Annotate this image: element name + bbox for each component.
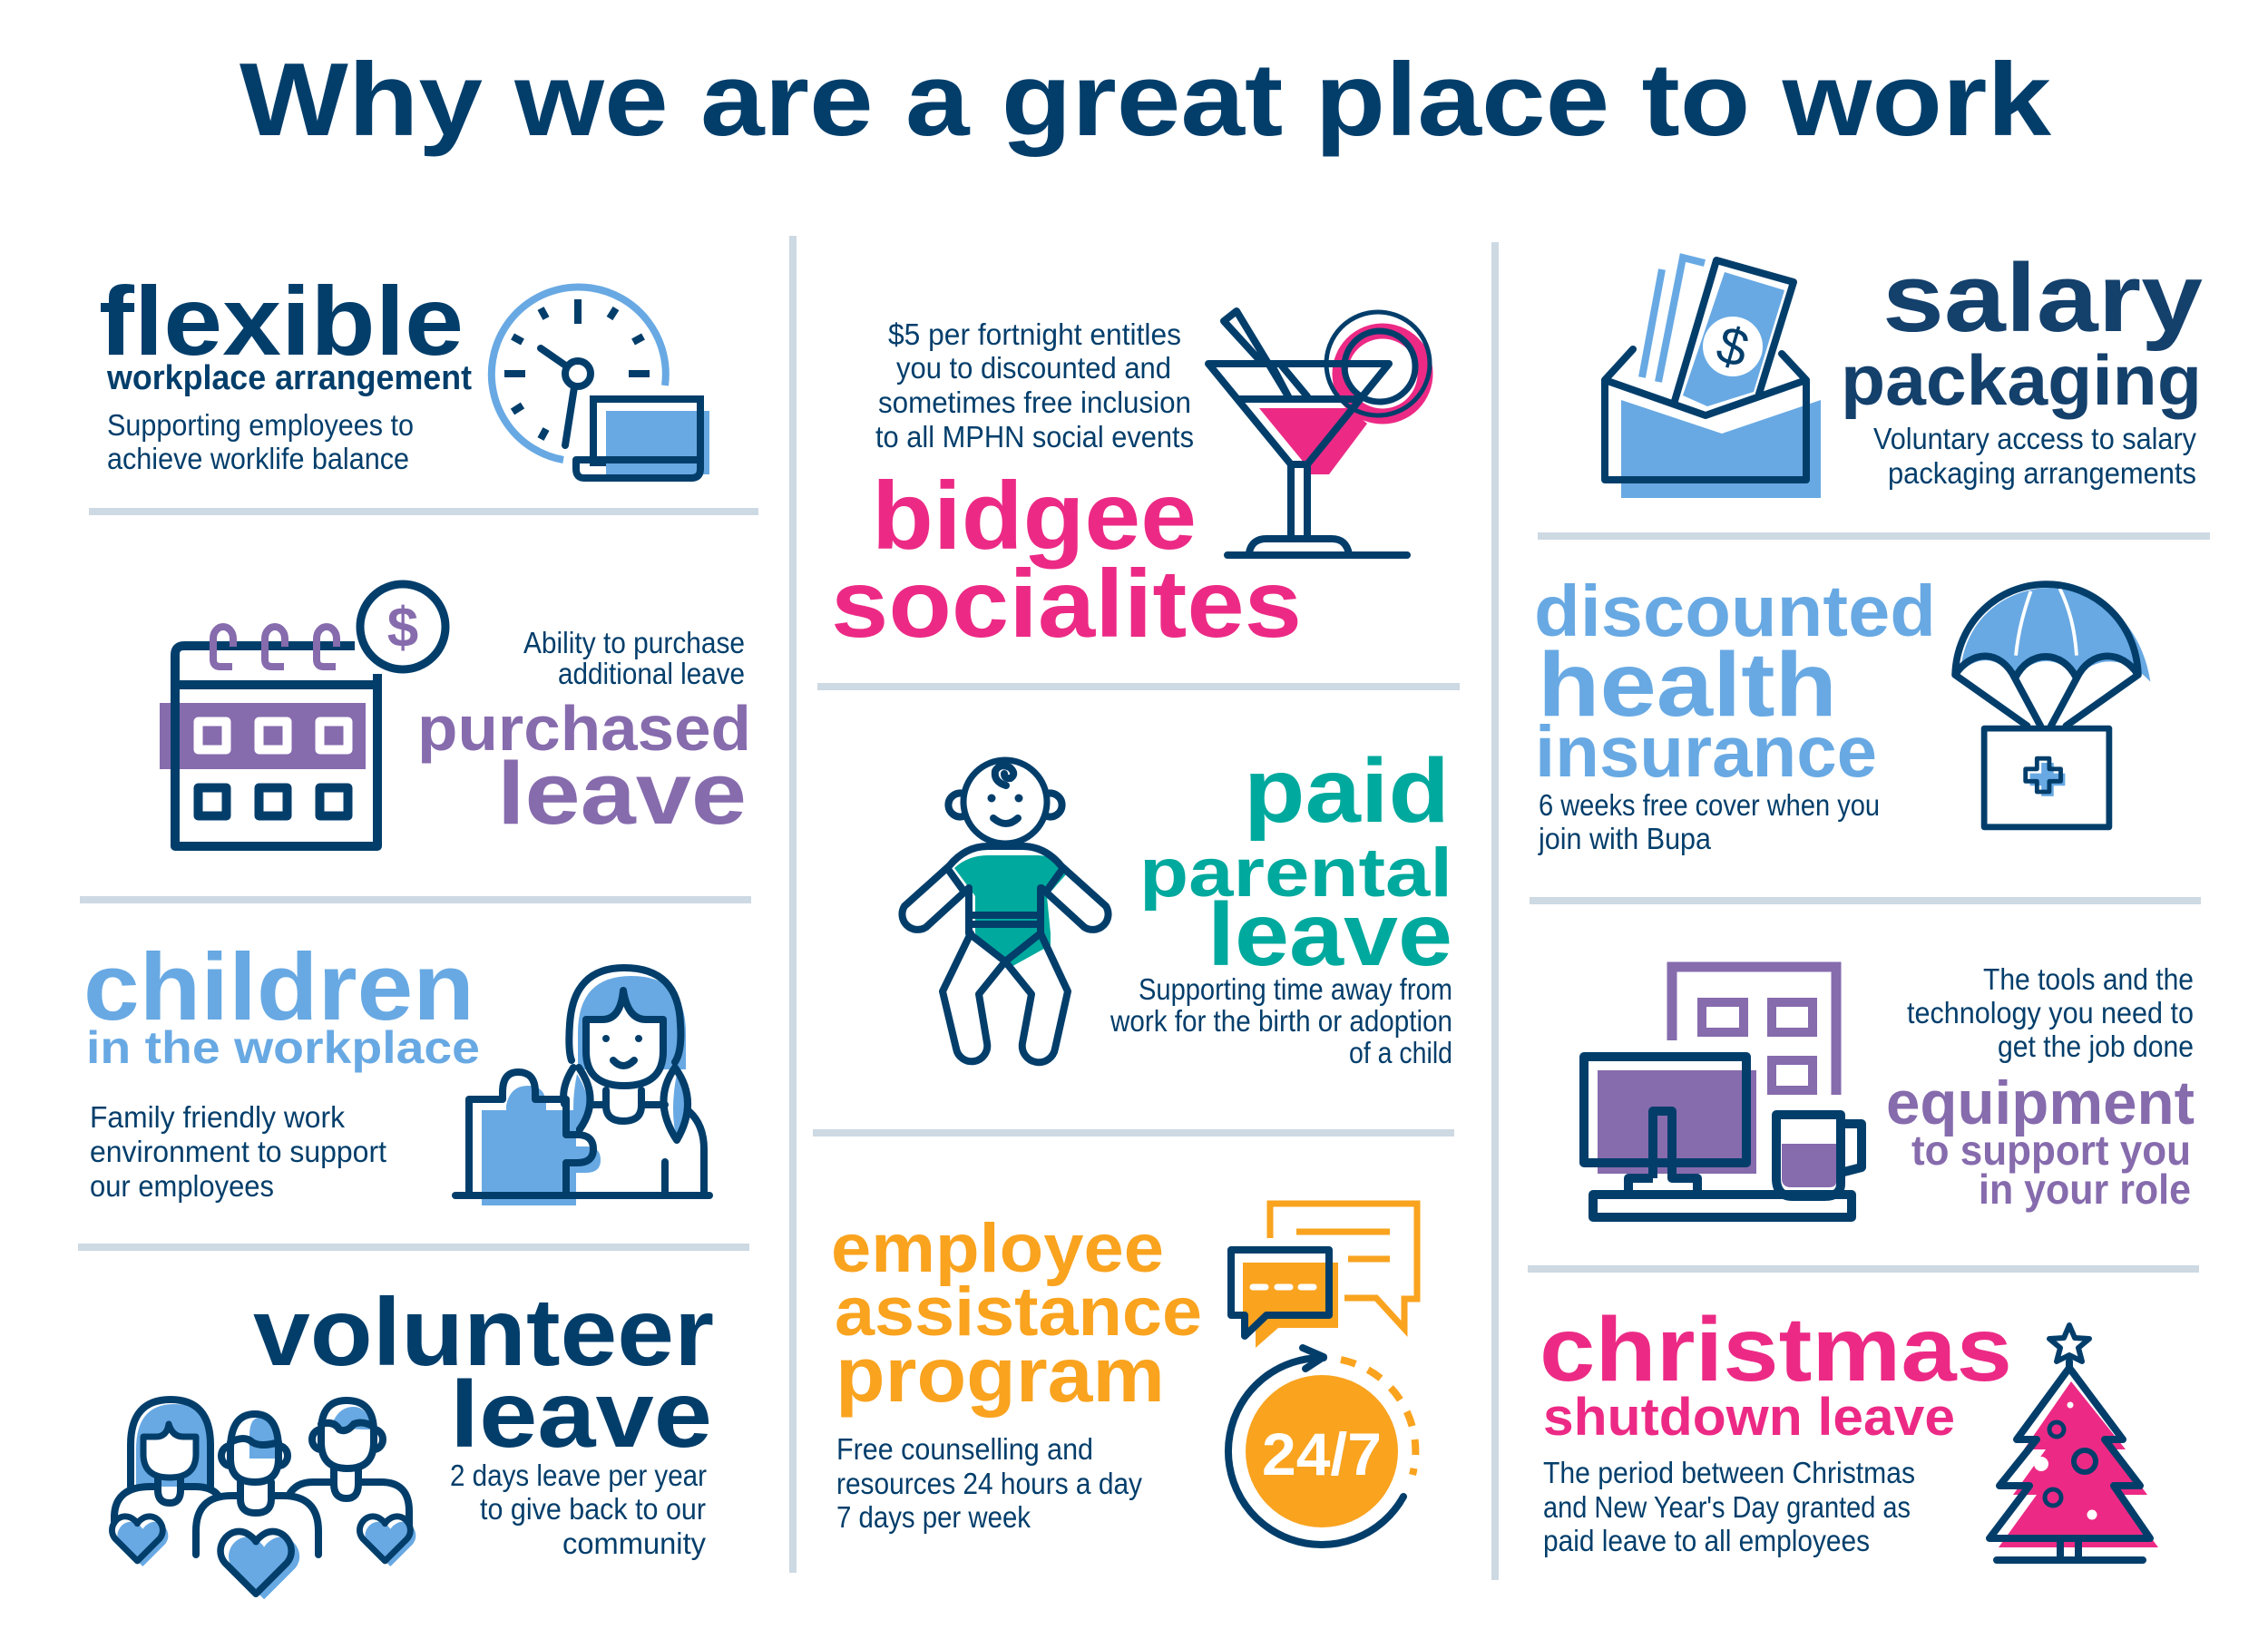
description: bidgee socialites [875, 317, 1194, 454]
description: salary packaging: Voluntary access to salary [1873, 422, 2196, 455]
description: employee assistance program: resources 24 hours a day [836, 1467, 1142, 1500]
description: paid parental leave: work for the birth or adoption [1110, 1004, 1452, 1038]
heading: bidgee: bidgee [872, 463, 1197, 570]
description: discounted health insurance: join with Bupa [1538, 822, 1712, 855]
icon: envelope with money [1605, 258, 1821, 498]
description: employee assistance program [836, 1432, 1142, 1534]
description: christmas: The period between Christmas [1543, 1456, 1915, 1489]
subheading: to support you: to support you [1911, 1127, 2191, 1174]
panel: volunteer leave [112, 1279, 714, 1599]
description: bidgee socialites: $5 per fortnight entitles [888, 317, 1181, 351]
panel: flexible workplace arrangement [99, 266, 709, 478]
panel: paid parental leave [902, 740, 1452, 1069]
heading: purchased: purchased [417, 693, 751, 764]
description: volunteer leave [450, 1459, 707, 1560]
description: equipment: get the job done [1998, 1029, 2194, 1063]
panel: children in the workplace [83, 934, 709, 1205]
icon: 24/7 clock: 24/7 [1262, 1420, 1382, 1488]
icon: cocktail glass [1208, 311, 1430, 555]
heading: parental: parental [1139, 834, 1452, 912]
description: equipment [1907, 962, 2194, 1063]
description: paid parental leave: of a child [1349, 1036, 1452, 1069]
description: discounted health insurance: 6 weeks free cover when you [1539, 788, 1880, 822]
heading: leave: leave [450, 1362, 712, 1468]
panel: purchased leave [160, 584, 751, 846]
description: salary packaging: packaging arrangements [1888, 456, 2196, 490]
description: bidgee socialites: sometimes free inclusion [878, 385, 1191, 419]
description: employee assistance program: 7 days per week [836, 1500, 1031, 1534]
heading: employee: employee [831, 1210, 1164, 1287]
description: children: our employees [90, 1169, 274, 1203]
description: bidgee socialites: to all MPHN social events [875, 420, 1194, 454]
description: volunteer leave: to give back to our [480, 1492, 706, 1526]
icon: clock and laptop [492, 287, 709, 478]
title: Why we are a great place to work [240, 43, 2052, 158]
description: discounted health insurance [1538, 788, 1880, 855]
heading: flexible: flexible [99, 266, 464, 376]
description: paid parental leave: Supporting time away from [1139, 972, 1452, 1006]
heading: discounted: discounted [1534, 571, 1936, 651]
description: flexible [107, 408, 414, 475]
icon: 24/7 clock [1228, 1348, 1415, 1545]
description: equipment: The tools and the [1983, 962, 2194, 996]
subheading: in your role: in your role [1979, 1166, 2191, 1213]
icon: speech bubbles [1231, 1204, 1417, 1348]
icon: three people with hearts [112, 1400, 415, 1599]
description: paid parental leave [1110, 972, 1452, 1069]
icon: calendar with dollar coin [160, 584, 445, 846]
subheading: in the workplace: in the workplace [86, 1022, 480, 1073]
description: bidgee socialites: you to discounted and [896, 351, 1171, 385]
heading: leave: leave [497, 744, 747, 843]
description: salary packaging [1873, 422, 2196, 490]
heading: equipment: equipment [1886, 1068, 2195, 1137]
icon: envelope with money: $ [1710, 315, 1755, 379]
description: employee assistance program: Free counselling and [836, 1432, 1093, 1466]
description: christmas: paid leave to all employees [1543, 1524, 1870, 1557]
description: purchased leave [523, 626, 745, 690]
subheading: shutdown leave: shutdown leave [1543, 1388, 1955, 1447]
heading: leave: leave [1207, 884, 1452, 984]
subheading: workplace arrangement: workplace arrangement [106, 359, 472, 397]
icon: christmas tree [1989, 1325, 2158, 1560]
description: purchased leave: Ability to purchase [523, 626, 745, 659]
heading: packaging: packaging [1841, 340, 2202, 420]
description: volunteer leave: community [562, 1527, 706, 1560]
description: flexible: Supporting employees to [107, 408, 414, 442]
description: volunteer leave: 2 days leave per year [450, 1459, 707, 1492]
description: purchased leave: additional leave [558, 657, 745, 690]
panel: equipment to support you in your role [1584, 962, 2195, 1217]
heading: christmas: christmas [1540, 1299, 2012, 1400]
description: christmas [1543, 1456, 1915, 1557]
panel: employee assistance program [831, 1204, 1417, 1545]
icon: building, computer and mug [1584, 967, 1862, 1217]
description: flexible: achieve worklife balance [107, 442, 409, 475]
panel: salary packaging [1605, 243, 2203, 498]
heading: socialites: socialites [831, 551, 1302, 658]
heading: program: program [836, 1332, 1165, 1419]
panel: christmas shutdown leave [1540, 1299, 2158, 1560]
icon: parachute with box [1955, 584, 2150, 827]
heading: salary: salary [1882, 243, 2203, 352]
heading: assistance: assistance [835, 1273, 1202, 1351]
heading: children: children [83, 934, 474, 1040]
heading: health: health [1538, 634, 1837, 736]
description: children: environment to support [90, 1135, 386, 1168]
heading: insurance: insurance [1535, 711, 1877, 792]
icon: baby [902, 760, 1109, 1062]
description: equipment: technology you need to [1907, 996, 2194, 1029]
icon: calendar with dollar coin: $ [387, 597, 418, 659]
panel: bidgee socialites [831, 311, 1430, 658]
description: children [90, 1100, 386, 1203]
icon: girl with puzzle piece [455, 968, 709, 1205]
panel: discounted health insurance [1534, 571, 2150, 855]
description: children: Family friendly work [90, 1100, 345, 1134]
description: christmas: and New Year's Day granted as [1543, 1490, 1911, 1524]
heading: paid: paid [1244, 740, 1450, 842]
heading: volunteer: volunteer [253, 1279, 714, 1386]
